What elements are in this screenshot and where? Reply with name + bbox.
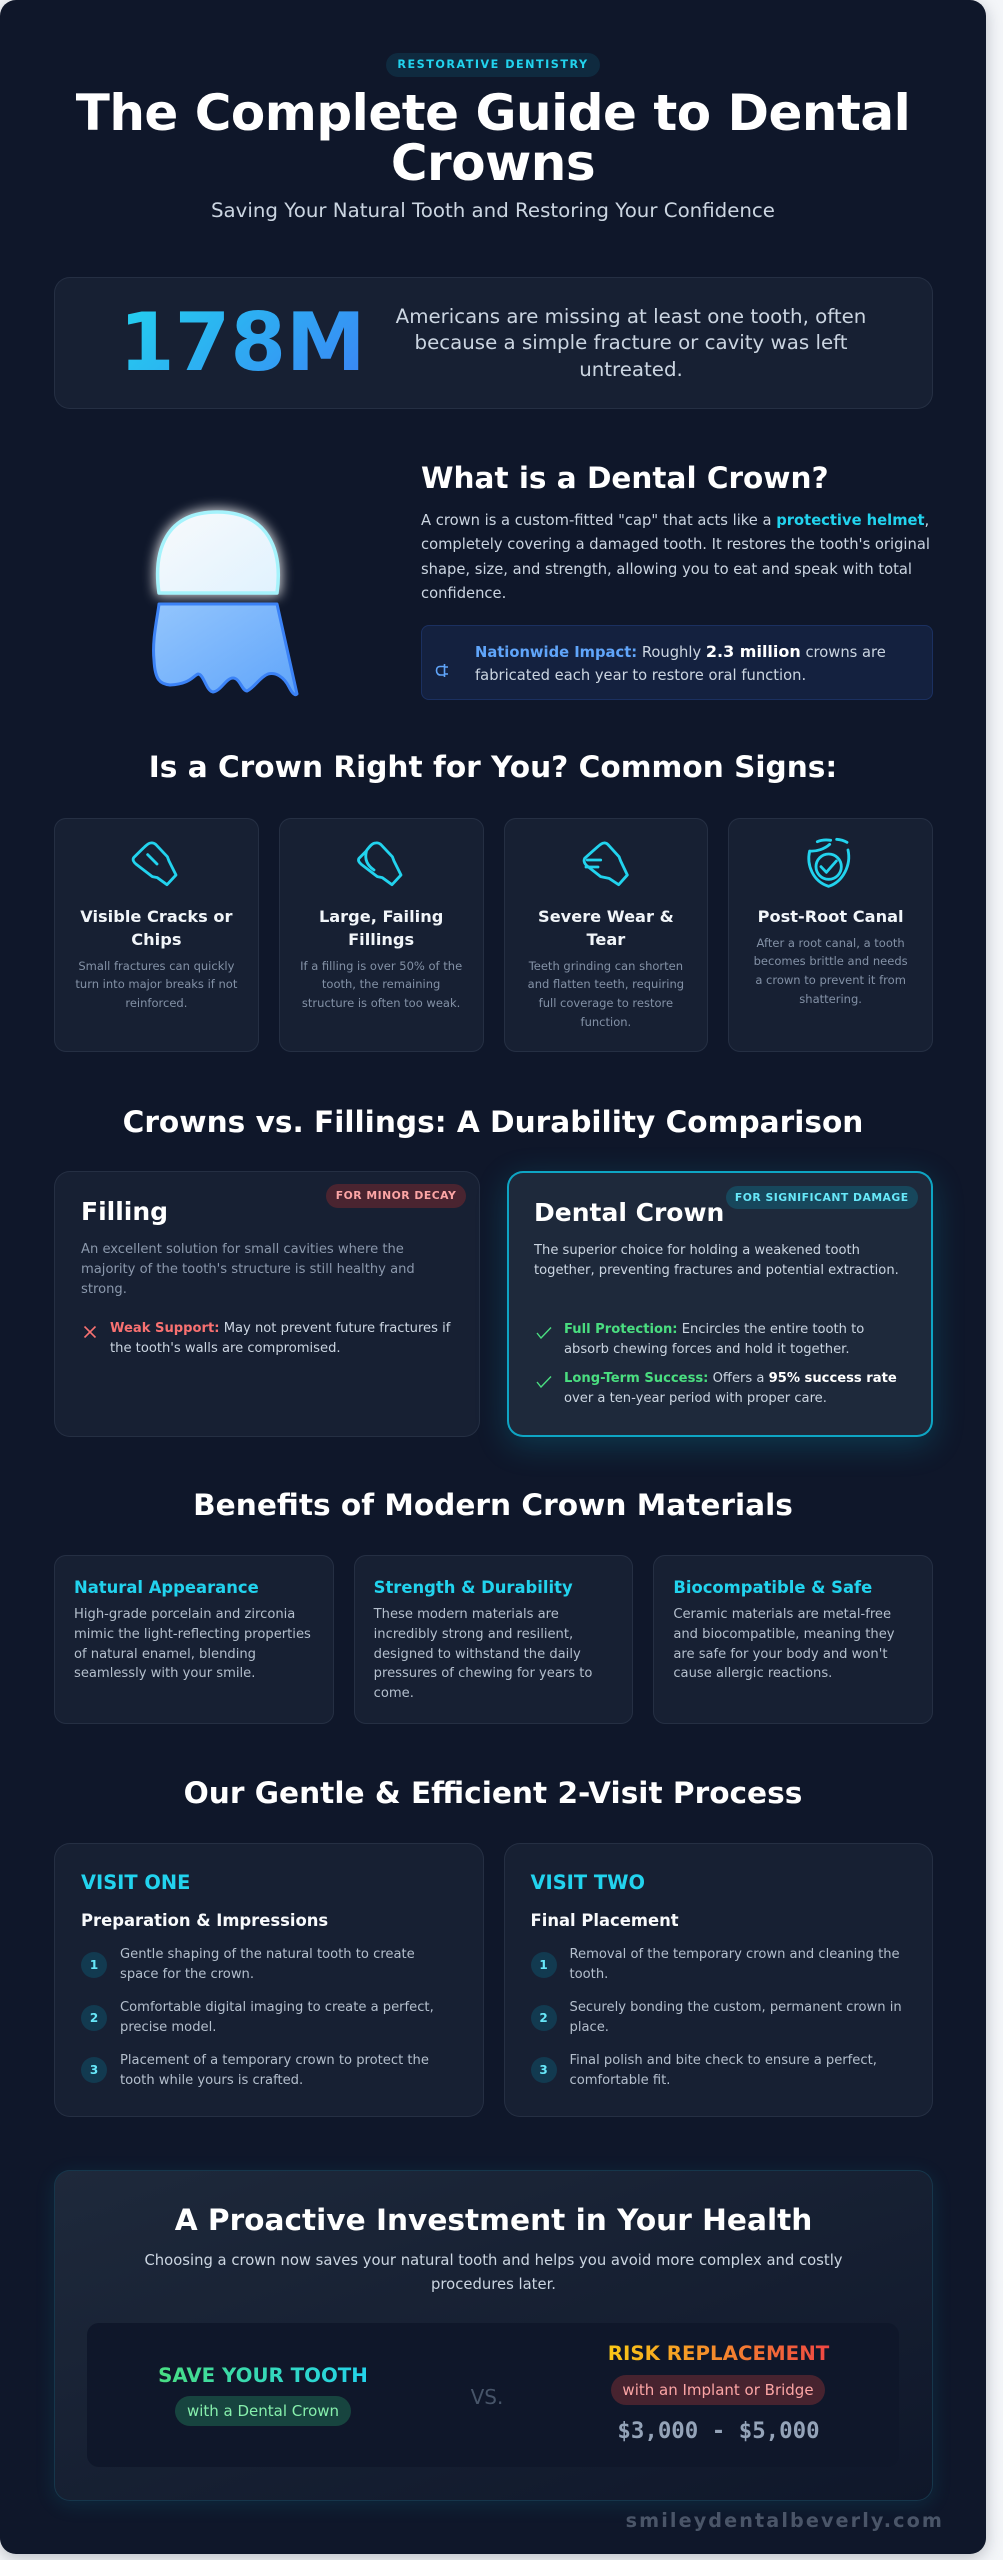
step 1 number [530,1952,556,1978]
icon: filled tooth [357,842,402,886]
step 1 text: tooth. [570,1967,608,1982]
risk pill [611,2375,825,2405]
benefit text: seamlessly with your smile. [74,1666,255,1681]
panel: visit two [504,1843,933,2117]
benefit text: come. [374,1686,414,1701]
benefit text: and biocompatible, meaning they [673,1627,895,1642]
step 1 text [120,1947,415,1982]
definition paragraph: confidence. [421,585,506,602]
stat text: untreated. [579,358,683,381]
step 3 text [570,2053,877,2088]
filling description [81,1242,415,1297]
benefit text: incredibly strong and resilient, [374,1627,573,1642]
filling heading: Filling [81,1197,168,1226]
card text [75,959,238,1010]
tooth root [154,604,297,695]
panel: visit one [54,1843,484,2117]
step 1 text: Removal of the temporary crown and cleaning the [570,1947,900,1962]
crown point: full protection: Full Protection: Encircles the entire tooth to [564,1322,864,1337]
panel: investment [54,2170,933,2501]
card text [300,959,462,1010]
tag: minor decay [326,1184,466,1208]
step 1 text: Gentle shaping of the natural tooth to create [120,1947,415,1962]
card title [80,906,232,948]
card text [754,936,908,1006]
benefit title: Strength & Durability [374,1578,573,1597]
crown heading: Dental Crown [534,1198,724,1227]
crown description: The superior choice for holding a weakened tooth [534,1243,860,1258]
subtitle: Saving Your Natural Tooth and Restoring Your Confidence [211,199,775,222]
risk heading: RISK REPLACEMENT [608,2342,829,2365]
card text [528,959,684,1029]
card text: becomes brittle and needs [754,954,908,968]
benefit text: are safe for your body and won't [673,1647,887,1662]
definition paragraph: A crown is a custom-fitted "cap" that acts like a protective helmet, [421,512,929,529]
visit label: VISIT TWO [530,1871,645,1894]
save pill: with a Dental Crown [187,2402,339,2420]
card text: and flatten teeth, requiring [528,977,684,991]
title: The Complete Guide to Dental [76,84,910,142]
step 2 number: 2 [539,2011,548,2025]
tag: significant damage [726,1186,918,1209]
filling point: the tooth's walls are compromised. [110,1341,341,1356]
definition paragraph [421,512,930,602]
card: post root canal [728,818,933,1052]
benefit text [374,1607,592,1701]
title [76,84,910,192]
benefit text: designed to withstand the daily [374,1647,581,1662]
card text: turn into major breaks if not [75,977,237,991]
step 2 text [570,2000,902,2035]
step 3 text: Placement of a temporary crown to protect the [120,2053,429,2068]
step 2 text [120,2000,434,2035]
icon: shield check [807,838,850,888]
step 3 text: comfortable fit. [570,2073,670,2088]
card text: reinforced. [125,996,187,1010]
benefit text: pressures of chewing for years to [374,1666,592,1681]
icon: cracked tooth [132,842,178,886]
benefit title: Natural Appearance [74,1578,259,1597]
card text: Small fractures can quickly [78,959,234,973]
step 2 number [530,2005,556,2031]
tag: significant damage: FOR SIGNIFICANT DAMAGE [735,1191,909,1204]
card text: Teeth grinding can shorten [529,959,683,973]
card: severe wear [504,818,708,1052]
visit label: VISIT ONE [81,1871,190,1894]
card title: Severe Wear & [538,906,674,926]
crown point: long term: Long-Term Success: Offers a 95% success rate [564,1371,897,1386]
step 2 number [81,2005,107,2031]
illustration: crowned tooth [145,500,298,696]
crown point: long term: over a ten-year period with proper care. [564,1391,827,1406]
stat number: 178M [119,296,366,389]
benefit text: These modern materials are [374,1607,559,1622]
step 2 text: Comfortable digital imaging to create a perfect, [120,2000,434,2015]
panel: dental crown [507,1171,933,1437]
icon: check [536,1376,552,1388]
card title: Tear [586,930,625,948]
step 2 number: 2 [90,2011,98,2025]
card: visible cracks [54,818,259,1052]
stat text: Americans are missing at least one tooth, often [396,305,866,328]
investment text: Choosing a crown now saves your natural tooth and helps you avoid more complex and costly [144,2252,843,2269]
eyebrow badge: RESTORATIVE DENTISTRY [397,58,589,71]
section heading: what is a crown: What is a Dental Crown? [421,461,829,495]
card text: function. [581,1015,631,1029]
definition paragraph: completely covering a damaged tooth. It restores the tooth's original [421,536,930,553]
step 1 text [570,1947,900,1982]
stat text: because a simple fracture or cavity was left [415,331,847,354]
step 3 text: tooth while yours is crafted. [120,2073,303,2088]
card title: Fillings [348,930,414,948]
card: failing fillings [279,818,484,1052]
filling description: An excellent solution for small cavities where the [81,1242,404,1257]
card title: Chips [131,930,181,948]
crown description: together, preventing fractures and potential extraction. [534,1263,899,1278]
panel: filling [54,1171,480,1437]
filling description: strong. [81,1282,127,1297]
versus label: VS. [471,2385,503,2409]
section heading: comparison: Crowns vs. Fillings: A Durability Comparison [123,1105,863,1139]
benefit title: Biocompatible & Safe [673,1578,872,1597]
step 3 text: Final polish and bite check to ensure a perfect, [570,2053,877,2068]
card text: structure is often too weak. [302,996,460,1010]
callout text: Nationwide Impact: Roughly 2.3 million crowns are [475,642,886,661]
crown point: long term [564,1371,897,1406]
section heading: common signs: Is a Crown Right for You? Common Signs: [149,750,837,784]
card title [538,906,674,948]
stat text [396,305,866,381]
benefit text: cause allergic reactions. [673,1666,832,1681]
card: natural appearance [54,1555,334,1724]
benefit text: mimic the light-reflecting properties [74,1627,311,1642]
card text: tooth, the remaining [322,977,440,991]
card text: shattering. [799,992,862,1006]
benefit text [673,1607,895,1681]
crown cap [158,512,278,593]
step 3 number: 3 [90,2063,98,2077]
benefit text [74,1607,311,1681]
icon: check [536,1327,552,1339]
save pill [175,2396,351,2426]
website watermark: smileydentalbeverly.com [626,2509,944,2532]
replacement price: $3,000 - $5,000 [617,2418,820,2444]
step 3 text [120,2053,429,2088]
tag: minor decay: FOR MINOR DECAY [336,1189,456,1202]
card title: Large, Failing [319,906,443,926]
title: Crowns [391,134,595,192]
step 3 number: 3 [539,2063,548,2077]
card text: After a root canal, a tooth [757,936,905,950]
eyebrow badge [386,53,600,77]
step 2 text: Securely bonding the custom, permanent crown in [570,2000,902,2015]
step 1 number: 1 [90,1958,98,1972]
benefit text: of natural enamel, blending [74,1647,256,1662]
callout: nationwide impact [421,625,933,700]
card title: Visible Cracks or [80,906,232,926]
step 1 number [81,1952,107,1978]
section heading: benefits: Benefits of Modern Crown Materials [193,1488,793,1522]
save heading: SAVE YOUR TOOTH [158,2364,368,2387]
cost comparison box [87,2323,899,2467]
crown point: full protection: absorb chewing forces and hold it together. [564,1342,850,1357]
card text: If a filling is over 50% of the [300,959,462,973]
step 3 number [530,2057,556,2083]
step 2 text: place. [570,2020,609,2035]
card title: Post-Root Canal [758,906,904,926]
investment heading: A Proactive Investment in Your Health [175,2203,812,2237]
card title [319,906,443,948]
card text: full coverage to restore [539,996,673,1010]
benefit text: Ceramic materials are metal-free [673,1607,891,1622]
benefit text: High-grade porcelain and zirconia [74,1607,295,1622]
step 3 number [81,2057,107,2083]
callout text: fabricated each year to restore oral function. [475,667,806,684]
icon: crown device [436,664,448,677]
stat panel [54,277,933,409]
filling point [110,1321,451,1356]
callout text [475,642,886,684]
step 2 text: precise model. [120,2020,216,2035]
icon: cross [84,1326,96,1338]
investment text [144,2252,843,2292]
card: biocompatible [653,1555,933,1724]
investment text: procedures later. [431,2276,556,2292]
crown description [534,1243,899,1278]
step 1 number: 1 [539,1958,548,1972]
visit subtitle: Final Placement [530,1911,679,1930]
filling point: Weak Support: May not prevent future fractures if [110,1321,450,1336]
card: strength [354,1555,633,1724]
section heading: process: Our Gentle & Efficient 2-Visit Process [184,1776,802,1810]
risk pill: with an Implant or Bridge [622,2381,814,2399]
step 1 text: space for the crown. [120,1967,254,1982]
definition paragraph: shape, size, and strength, allowing you to eat and speak with total [421,561,912,578]
crown point: full protection [564,1322,864,1357]
visit subtitle: Preparation & Impressions [81,1911,328,1930]
crown glow [158,512,278,593]
filling description: majority of the tooth's structure is still healthy and [81,1262,415,1277]
card text: a crown to prevent it from [755,973,906,987]
icon: worn tooth [582,842,629,886]
